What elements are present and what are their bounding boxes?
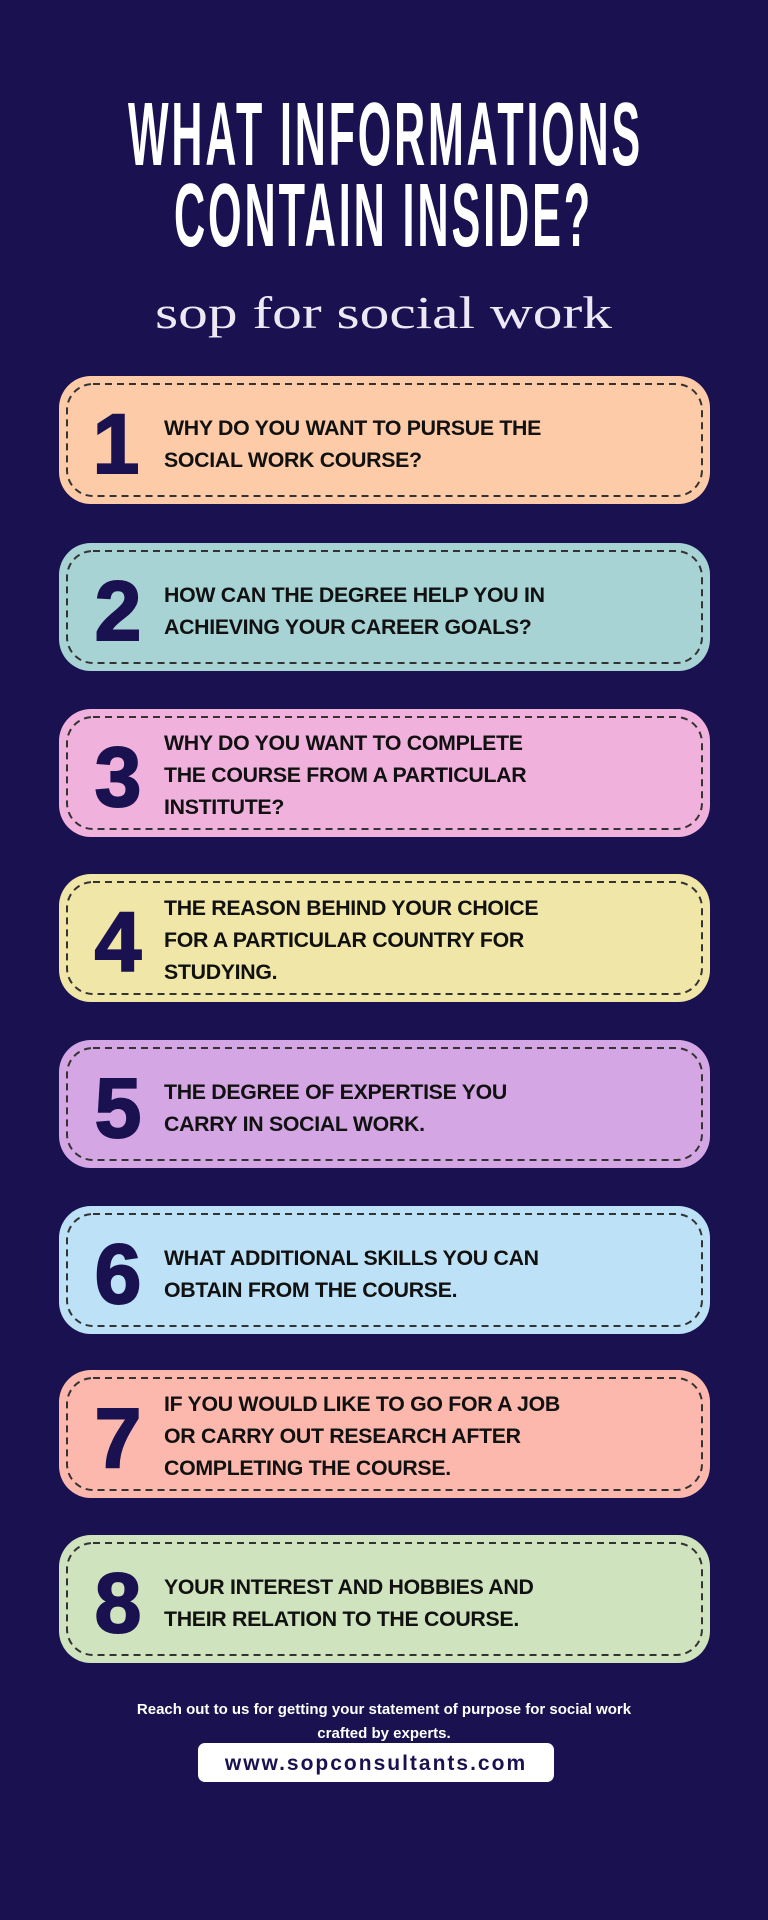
card 6: OBTAIN FROM THE COURSE. — [164, 1278, 457, 1302]
number 8: 8 — [95, 1556, 141, 1650]
text 6: WHAT ADDITIONAL SKILLS YOU CAN — [164, 1246, 539, 1270]
url button: www.sopconsultants.com — [224, 1752, 527, 1775]
number 1: 1 — [93, 397, 139, 491]
number 2: 2 — [95, 564, 141, 658]
card 1 — [59, 376, 710, 504]
card 2: ACHIEVING YOUR CAREER GOALS? — [164, 615, 532, 639]
number 5: 5 — [95, 1061, 141, 1155]
number 3: 3 — [95, 730, 141, 824]
card 7 — [59, 1370, 710, 1498]
card 8: THEIR RELATION TO THE COURSE. — [164, 1607, 519, 1631]
text 5: THE DEGREE OF EXPERTISE YOU — [164, 1080, 507, 1104]
text 8: YOUR INTEREST AND HOBBIES AND — [164, 1575, 534, 1599]
card 1: SOCIAL WORK COURSE? — [164, 448, 422, 472]
number 7: 7 — [95, 1391, 141, 1485]
card 5: CARRY IN SOCIAL WORK. — [164, 1112, 425, 1136]
card 5 — [59, 1040, 710, 1168]
card 4: STUDYING. — [164, 960, 277, 984]
card 4: FOR A PARTICULAR COUNTRY FOR — [164, 928, 524, 952]
card 3: INSTITUTE? — [164, 795, 284, 819]
footer text — [137, 1701, 632, 1742]
text 2: HOW CAN THE DEGREE HELP YOU IN — [164, 583, 545, 607]
subtitle: sop for social work — [155, 287, 612, 338]
text 3: WHY DO YOU WANT TO COMPLETE — [164, 731, 523, 755]
footer text: crafted by experts. — [317, 1725, 451, 1742]
text 1: WHY DO YOU WANT TO PURSUE THE — [164, 416, 541, 440]
number 4: 4 — [95, 895, 142, 989]
footer text: Reach out to us for getting your statement of purpose for social work — [137, 1701, 632, 1718]
card 4 — [59, 874, 710, 1002]
card 7: OR CARRY OUT RESEARCH AFTER — [164, 1424, 521, 1448]
url button — [198, 1743, 554, 1782]
card 7: COMPLETING THE COURSE. — [164, 1456, 451, 1480]
card 6 — [59, 1206, 710, 1334]
card 2 — [59, 543, 710, 671]
text 7: IF YOU WOULD LIKE TO GO FOR A JOB — [164, 1392, 560, 1416]
card 8 — [59, 1535, 710, 1663]
text 4: THE REASON BEHIND YOUR CHOICE — [164, 896, 538, 920]
card 3 — [59, 709, 710, 837]
number 6: 6 — [95, 1227, 141, 1321]
title — [128, 85, 643, 266]
card 3: THE COURSE FROM A PARTICULAR — [164, 763, 526, 787]
